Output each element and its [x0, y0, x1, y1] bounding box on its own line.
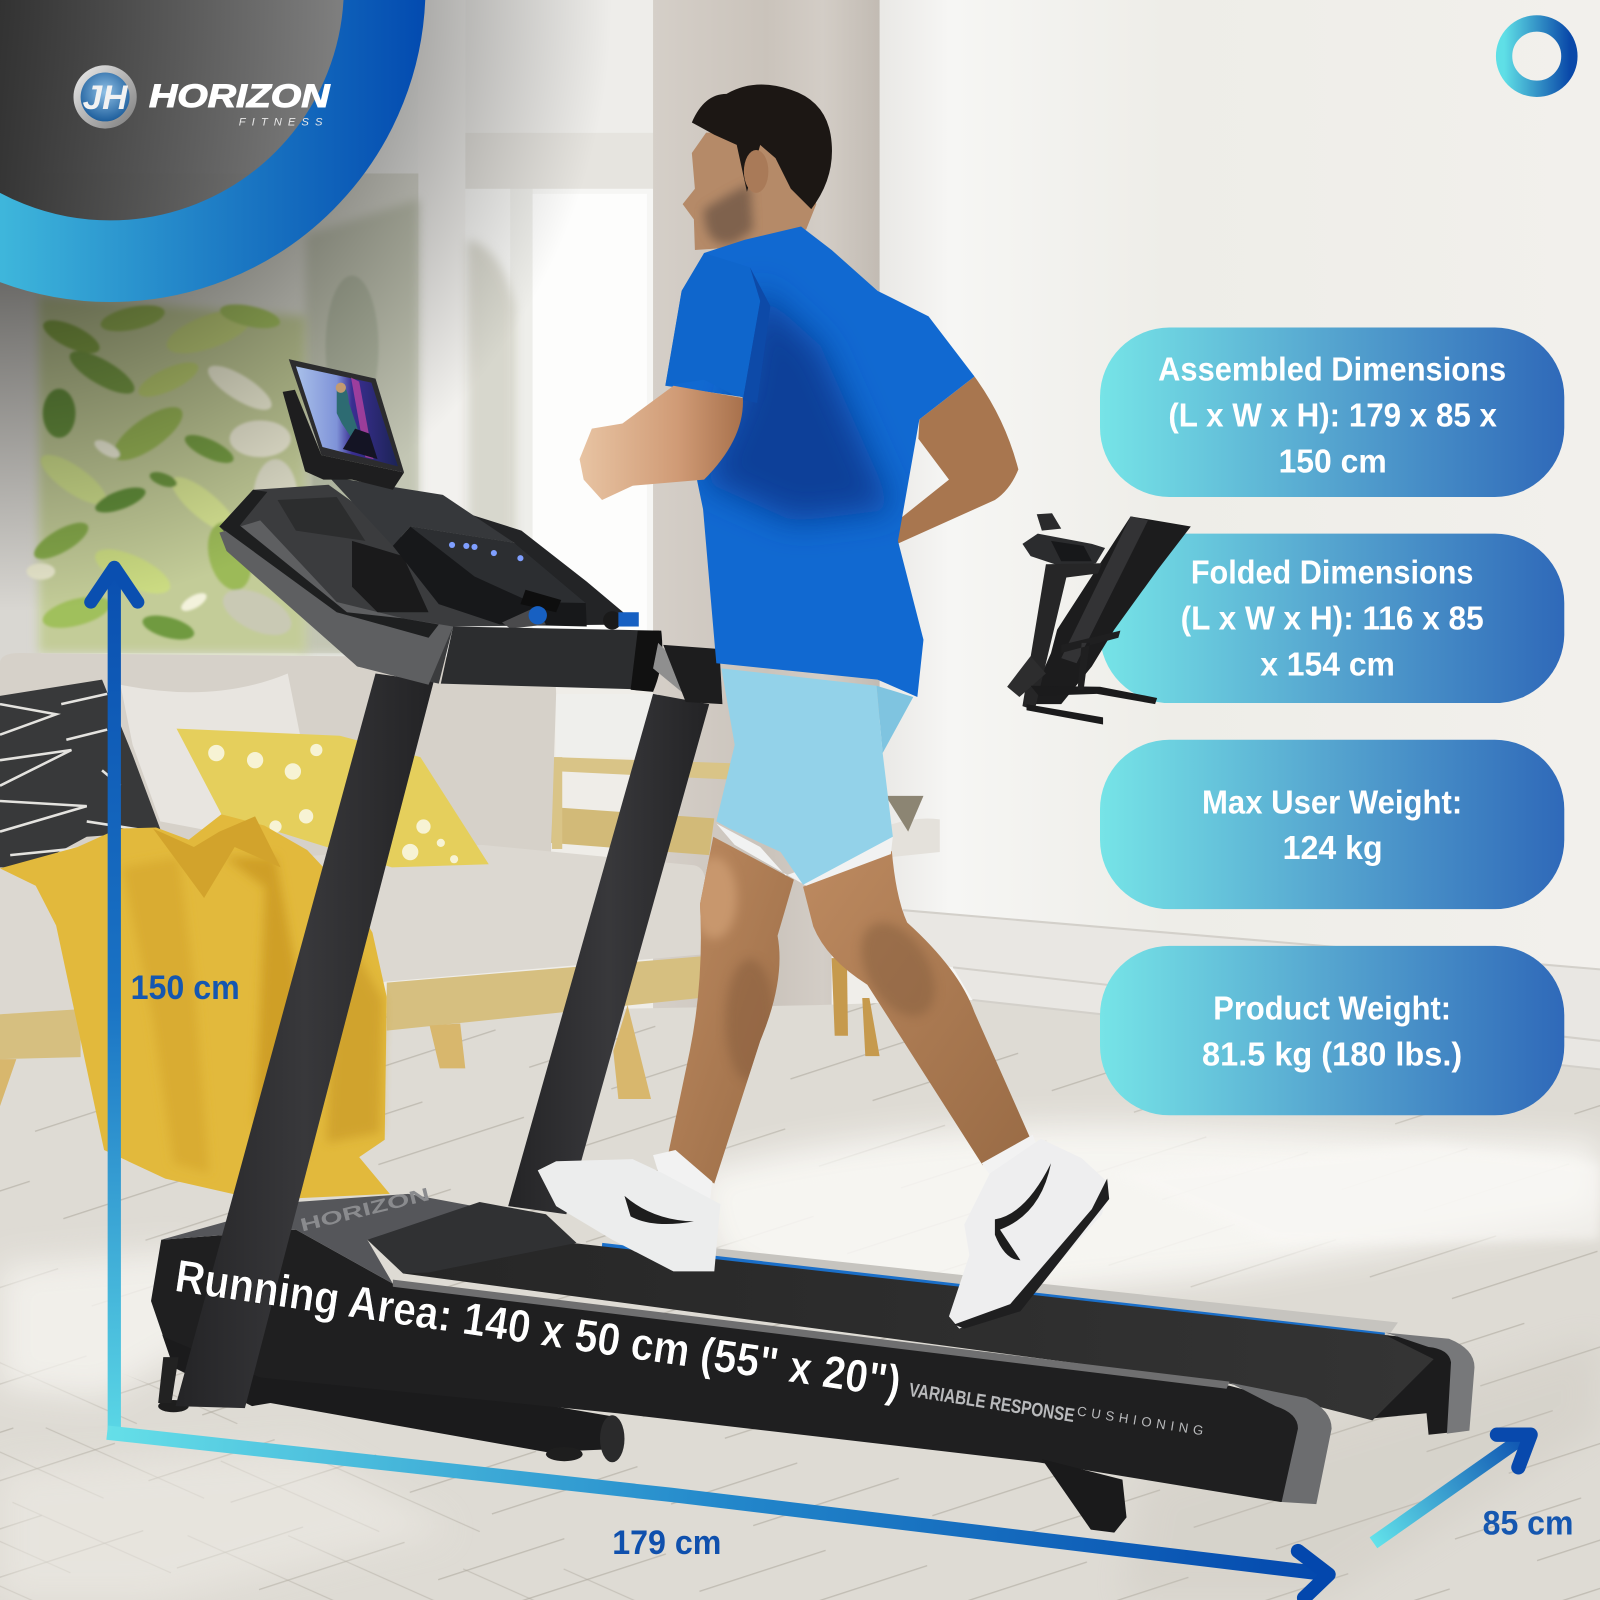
front end cap — [1230, 1383, 1332, 1504]
legs — [668, 837, 1030, 1184]
corner logo badge — [0, 0, 385, 261]
pill: product weight: Product Weight: — [1213, 990, 1451, 1027]
large treadmill — [151, 359, 1474, 1533]
length arrow — [107, 1433, 1329, 1598]
pill: max user weight: Max User Weight: — [1202, 784, 1462, 821]
far rail and stripe — [602, 1245, 1398, 1337]
rear shoe and sock — [538, 1150, 720, 1271]
front leg — [803, 851, 1030, 1165]
pill: max user weight — [1100, 740, 1564, 909]
folded treadmill image — [1007, 513, 1191, 724]
motor cover: HORIZON — [298, 1183, 432, 1236]
floor — [0, 1000, 1600, 1600]
pill: product weight: 81.5 kg (180 lbs.) — [1202, 1036, 1462, 1073]
ear — [744, 150, 768, 193]
motor cover — [161, 1183, 577, 1284]
head and neck — [683, 133, 816, 250]
pill: assembled dimensions — [1100, 328, 1564, 497]
horizon logo: HORIZON — [149, 77, 331, 114]
pill: folded dimensions — [1100, 534, 1564, 703]
white pillow — [120, 673, 306, 832]
yellow floral pillow — [177, 729, 489, 867]
back arm — [893, 377, 1018, 546]
height arrow — [91, 567, 138, 1437]
yellow throw blanket — [0, 814, 390, 1200]
wooden base — [0, 956, 704, 1059]
tablet on console — [283, 359, 404, 490]
wall — [878, 0, 1600, 1082]
variable response label: VARIABLE RESPONSE — [907, 1379, 1076, 1427]
shirt — [665, 227, 974, 697]
running belt — [403, 1243, 1434, 1420]
front arm — [580, 386, 743, 500]
top-right ring icon — [1504, 23, 1569, 89]
pill: folded dimensions: (L x W x H): 116 x 85 — [1181, 601, 1484, 638]
pill: folded dimensions: Folded Dimensions — [1191, 555, 1473, 592]
horizon logo — [73, 65, 331, 129]
side trim — [393, 1280, 1230, 1389]
horizon logo: FITNESS — [239, 117, 323, 129]
dark patterned cushion — [0, 680, 161, 867]
hair — [692, 85, 832, 209]
pill: max user weight: 124 kg — [1283, 830, 1383, 867]
left upright — [176, 673, 434, 1408]
running man — [538, 85, 1109, 1329]
right upright — [508, 694, 709, 1214]
console visor — [329, 477, 514, 546]
side rail — [151, 1230, 1324, 1502]
pill: product weight — [1100, 946, 1564, 1115]
pill: assembled dimensions: 150 cm — [1279, 443, 1387, 480]
transport wheel — [1042, 1459, 1127, 1533]
curtain — [653, 0, 880, 1020]
dark disc — [0, 0, 345, 221]
width arrow — [1373, 1434, 1531, 1543]
length label: 179 cm — [612, 1524, 721, 1562]
lower frame — [158, 1335, 624, 1462]
rear end cap — [1372, 1335, 1472, 1435]
sofa back — [0, 653, 556, 888]
baseboard — [903, 910, 1600, 1069]
width label: 85 cm — [1483, 1505, 1573, 1543]
pill: folded dimensions: x 154 cm — [1260, 647, 1395, 684]
handlebar — [441, 627, 722, 704]
tree outside window — [27, 173, 418, 653]
running area label: Running Area: 140 x 50 cm (55" x 20") — [172, 1249, 904, 1408]
sofa seat — [0, 845, 706, 1014]
variable response label: CUSHIONING — [1076, 1403, 1204, 1438]
sofa — [0, 653, 732, 1106]
pill: assembled dimensions: Assembled Dimensions — [1158, 352, 1506, 389]
blue grip end caps — [502, 606, 639, 630]
front shoe and sock — [949, 1135, 1109, 1329]
pill: assembled dimensions: (L x W x H): 179 x 85 x — [1168, 398, 1497, 435]
gradient ring — [0, 0, 385, 261]
control panel — [393, 527, 587, 627]
shorts — [716, 668, 913, 886]
rear leg — [668, 837, 794, 1184]
variable response label — [907, 1379, 1204, 1438]
height label: 150 cm — [131, 969, 240, 1007]
rear console hood — [460, 511, 638, 624]
wooden frame behind the sofa — [550, 694, 732, 855]
side table — [832, 796, 940, 1056]
horizon logo: JH — [83, 79, 129, 117]
window and sheer curtains — [0, 0, 663, 673]
console tray — [219, 485, 633, 685]
dark corner tint over the window — [0, 0, 653, 653]
